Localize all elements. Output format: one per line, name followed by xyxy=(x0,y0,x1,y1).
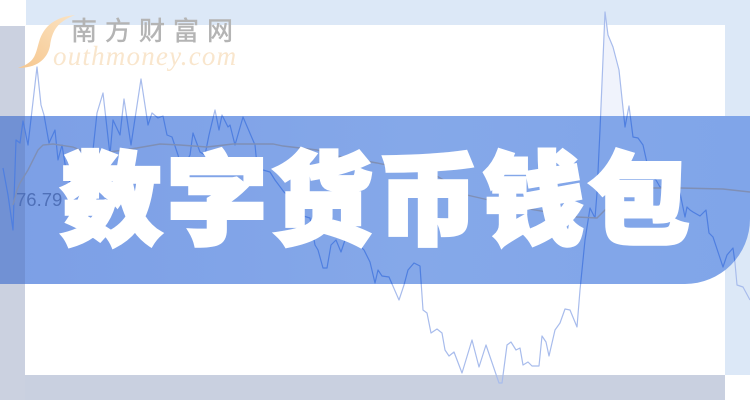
moving average line xyxy=(13,144,750,218)
chart fill under peak xyxy=(600,12,625,127)
title: 数字货币钱包 xyxy=(62,146,694,258)
banner xyxy=(0,116,750,284)
axis value label: 76.79 xyxy=(16,189,62,210)
logo Chinese name: 南方财富网 xyxy=(71,16,241,46)
line chart inside banner xyxy=(2,116,736,284)
icon: orange swoosh xyxy=(18,15,75,68)
logo Latin name: outhmoney.com xyxy=(53,41,237,71)
logo: southmoney xyxy=(18,15,241,71)
banner left overlap xyxy=(0,116,25,284)
